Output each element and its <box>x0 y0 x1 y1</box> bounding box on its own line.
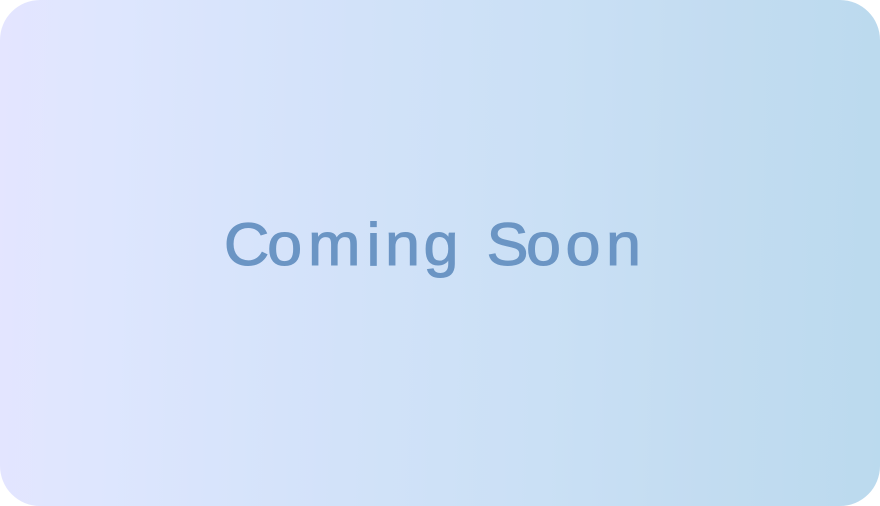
heading: Coming Soon: Coming Soon <box>224 211 641 279</box>
